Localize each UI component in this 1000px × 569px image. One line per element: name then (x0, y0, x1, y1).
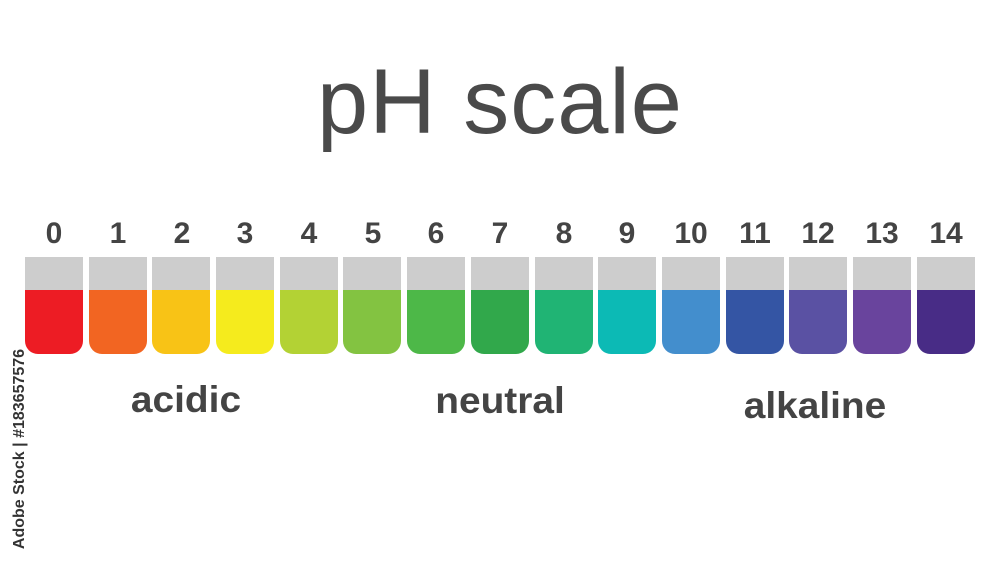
numbers: 12 (801, 217, 835, 250)
numbers: 4 (301, 217, 317, 250)
numbers (46, 217, 963, 250)
numbers: 1 (110, 217, 126, 250)
label: neutral: neutral (435, 380, 565, 421)
numbers: 2 (174, 217, 190, 250)
numbers: 5 (365, 217, 381, 250)
label: acidic: acidic (131, 379, 241, 420)
title: pH scale (317, 51, 683, 153)
numbers: 13 (865, 217, 899, 250)
label: alkaline: alkaline (744, 385, 886, 426)
numbers: 8 (556, 217, 572, 250)
numbers: 10 (674, 217, 708, 250)
numbers: 7 (492, 217, 508, 250)
numbers: 6 (428, 217, 444, 250)
watermark id: Adobe Stock | #183657576 (11, 349, 28, 549)
tubes (25, 257, 975, 354)
numbers: 9 (619, 217, 635, 250)
numbers: 3 (237, 217, 253, 250)
numbers: 14 (929, 217, 963, 250)
numbers: 11 (739, 217, 771, 250)
numbers: 0 (46, 217, 62, 250)
